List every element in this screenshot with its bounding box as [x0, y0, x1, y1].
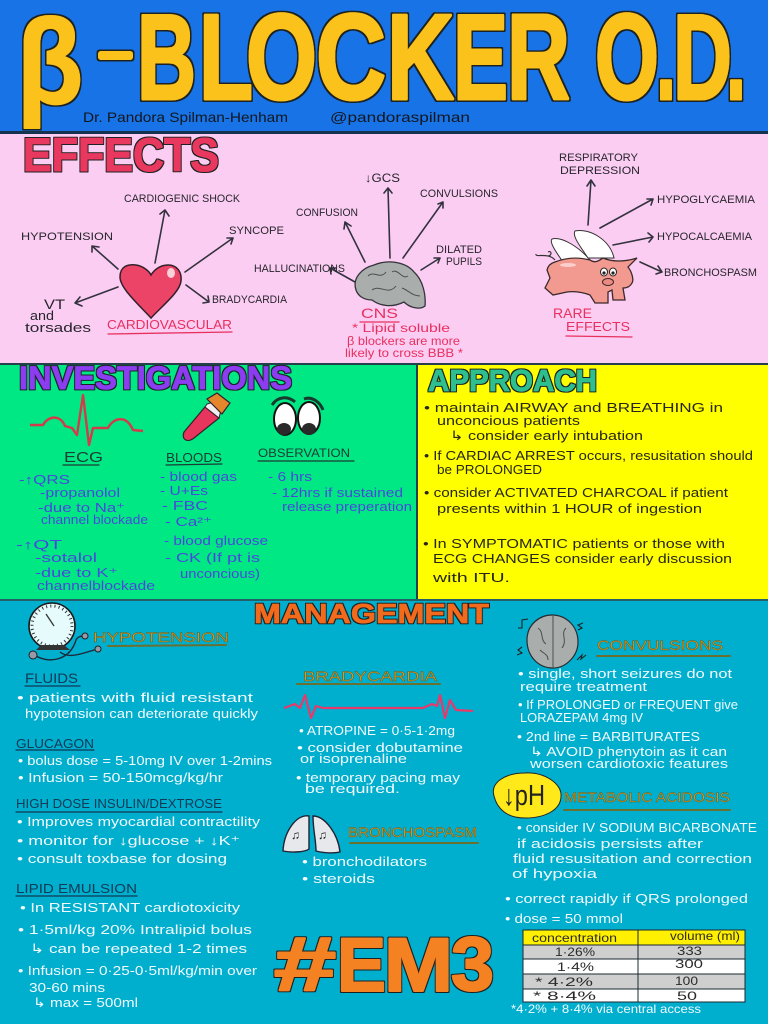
labels: cardiovascular effects: and	[30, 308, 54, 323]
labels: rare effects: RESPIRATORY	[559, 152, 639, 164]
labels: CNS effects: CONVULSIONS	[420, 188, 498, 200]
author handle: @pandoraspilman	[330, 109, 470, 125]
list: metabolic acidosis: • dose = 50 mmol	[505, 911, 623, 926]
table: bicarbonate doses: concentration	[532, 931, 617, 945]
heading: hypotension: HYPOTENSION	[93, 629, 229, 645]
icon: heart	[120, 265, 181, 318]
label: rare effects: RARE	[553, 305, 592, 321]
column: ECG: -↑QRS	[19, 472, 70, 487]
block: high dose insulin: HIGH DOSE INSULIN/DEXTROSE	[16, 797, 222, 811]
list: bradycardia: • ATROPINE = 0·5-1·2mg	[299, 723, 455, 738]
column: ECG	[16, 449, 155, 593]
list: bradycardia	[296, 723, 463, 796]
block: fluids: • patients with fluid resistant	[17, 690, 254, 705]
approach bullet list: presents within 1 HOUR of ingestion	[437, 501, 702, 516]
list: metabolic acidosis: • correct rapidly if QRS prolonged	[505, 891, 748, 906]
labels: cardiovascular effects: CARDIOGENIC SHOCK	[124, 193, 241, 205]
approach bullet list: with ITU.	[431, 570, 510, 585]
panel: title banner	[0, 0, 768, 134]
labels: rare effects: DEPRESSION	[560, 165, 640, 177]
arrows: CNS effects	[330, 188, 443, 282]
block: fluids	[17, 670, 259, 721]
column: bloods: - FBC	[162, 498, 208, 513]
approach heading: APPROACH	[428, 363, 597, 398]
block: lipid emulsion: ↳ max = 500ml	[33, 995, 138, 1010]
list: metabolic acidosis: • consider IV SODIUM BICARBONATE	[517, 820, 757, 835]
approach bullet list: ECG CHANGES consider early discussion	[433, 551, 732, 566]
labels: CNS effects: ↓GCS	[365, 171, 400, 185]
list: metabolic acidosis: if acidosis persists after	[517, 836, 704, 851]
panel: investigations	[0, 360, 768, 600]
table: bicarbonate doses	[523, 929, 745, 1003]
hashtag: #	[274, 922, 336, 1007]
table: bicarbonate doses: * 8·4%	[533, 989, 597, 1003]
investigations heading: INVESTIGATIONS	[19, 360, 292, 396]
arrows: rare effects	[587, 180, 662, 274]
column: ECG: channel blockade	[41, 512, 148, 527]
note: lipid soluble	[345, 321, 463, 360]
column: observation	[258, 446, 412, 514]
approach bullet list: be PROLONGED	[437, 462, 542, 477]
labels: rare effects: BRONCHOSPASM	[664, 267, 757, 279]
panel: management	[0, 598, 768, 1024]
table: bicarbonate doses: * 4·2%	[535, 975, 594, 989]
arrows: cardiovascular effects	[75, 210, 233, 306]
labels: rare effects: HYPOGLYCAEMIA	[657, 194, 756, 206]
note: lipid soluble: likely to cross BBB *	[345, 346, 463, 360]
labels: CNS effects: CONFUSION	[296, 207, 358, 219]
column: bloods: - CK (If pt is	[165, 550, 261, 565]
block: lipid emulsion: • Infusion = 0·25-0·5ml/kg/min over	[18, 963, 258, 978]
labels: cardiovascular effects: torsades	[25, 320, 92, 335]
column: observation: OBSERVATION	[258, 446, 350, 460]
heading: convulsions	[597, 637, 730, 656]
label: cardiovascular: CARDIOVASCULAR	[107, 317, 232, 332]
icon: pH badge: ↓pH	[503, 780, 545, 812]
list: bronchospasm: • steroids	[302, 871, 376, 886]
labels: cardiovascular effects: BRADYCARDIA	[212, 294, 288, 306]
hashtag: 3	[451, 922, 494, 1007]
approach bullet list	[423, 400, 753, 585]
effects heading: EFFECTS	[23, 128, 219, 181]
table: bicarbonate doses: 1·4%	[557, 960, 594, 974]
list: convulsions	[517, 666, 738, 771]
column: bloods: - blood glucose	[164, 533, 268, 548]
block: glucagon: • bolus dose = 5-10mg IV over 1-2mins	[18, 753, 273, 768]
column: observation: release preperation	[282, 499, 412, 514]
table: bicarbonate doses: 300	[675, 957, 703, 971]
labels: CNS effects: DILATED	[436, 244, 482, 256]
column: ECG: -due to Na⁺	[38, 500, 125, 515]
approach bullet list: unconcious patients	[437, 413, 581, 428]
icon: eyes	[272, 398, 323, 435]
heading: bronchospasm: BRONCHOSPASM	[348, 824, 477, 840]
approach bullet list: ↳ consider early intubation	[450, 428, 643, 443]
column: ECG: -propanolol	[40, 485, 120, 500]
icon: brain	[355, 262, 425, 308]
author name: Dr. Pandora Spilman-Henham	[83, 109, 288, 125]
list: bronchospasm: • bronchodilators	[302, 854, 428, 869]
management heading: MANAGEMENT	[254, 598, 489, 629]
block: glucagon: • Infusion = 50-150mcg/kg/hr	[18, 770, 224, 785]
block: high dose insulin: • consult toxbase for dosing	[17, 851, 227, 866]
list: metabolic acidosis: fluid resusitation and correction	[513, 851, 752, 866]
icon: ECG trace	[30, 395, 143, 445]
label: rare effects: EFFECTS	[566, 319, 630, 334]
panel: effects	[0, 128, 768, 364]
labels: CNS effects: PUPILS	[446, 256, 482, 268]
block: lipid emulsion: LIPID EMULSION	[16, 882, 137, 896]
table: bicarbonate doses: 50	[677, 989, 697, 1003]
labels: rare effects: HYPOCALCAEMIA	[657, 231, 753, 243]
block: glucagon: GLUCAGON	[16, 737, 94, 751]
column: ECG: -↑QT	[16, 537, 62, 552]
column: ECG: -sotalol	[35, 550, 97, 565]
icon: pH badge	[493, 773, 561, 818]
block: lipid emulsion: • 1·5ml/kg 20% Intralipid bolus	[18, 922, 253, 937]
column: bloods: - U+Es	[160, 483, 209, 498]
hashtag: M	[384, 923, 453, 1008]
labels: CNS effects	[254, 171, 498, 275]
block: high dose insulin: • monitor for ↓glucose + ↓K⁺	[17, 833, 240, 848]
column: bloods: - Ca²⁺	[165, 514, 212, 529]
list: convulsions: ↳ AVOID phenytoin as it can	[530, 744, 727, 759]
list: convulsions: worsen cardiotoxic features	[529, 756, 729, 771]
heading: metabolic acidosis: METABOLIC ACIDOSIS	[564, 789, 730, 805]
icon: lungs: ♫	[291, 828, 300, 842]
block: high dose insulin: • Improves myocardial contractility	[17, 814, 261, 829]
hashtag: E	[337, 923, 386, 1008]
title text	[98, 0, 746, 125]
column: ECG: ECG	[64, 449, 103, 466]
icon: lungs	[283, 816, 340, 853]
table: bicarbonate doses: 1·26%	[555, 945, 595, 959]
block: lipid emulsion: 30-60 mins	[29, 980, 106, 995]
table: bicarbonate doses: 333	[677, 944, 702, 958]
column: ECG: -due to K⁺	[35, 565, 118, 580]
panel: approach	[416, 363, 768, 600]
block: high dose insulin	[16, 797, 261, 866]
block: lipid emulsion	[16, 882, 258, 1010]
icon: brain with seizure marks	[517, 615, 586, 668]
label: rare effects	[553, 305, 632, 337]
column: bloods: - blood gas	[160, 469, 238, 484]
labels: CNS effects: HALLUCINATIONS	[254, 263, 345, 275]
approach bullet list: • consider ACTIVATED CHARCOAL if patient	[424, 485, 728, 500]
hashtag	[274, 922, 494, 1008]
column: observation: - 6 hrs	[268, 469, 313, 484]
icon: lungs: ♫	[318, 828, 327, 842]
icon: bradycardia ECG	[284, 695, 473, 718]
approach bullet list: • maintain AIRWAY and BREATHING in	[424, 400, 723, 415]
note: central access: *4·2% + 8·4% via central access	[511, 1002, 701, 1016]
icon: blood tube	[183, 393, 230, 440]
block: glucagon	[16, 737, 273, 785]
labels: cardiovascular effects: VT	[44, 296, 66, 312]
block: fluids: hypotension can deteriorate quickly	[25, 706, 259, 721]
label: CNS: CNS	[361, 305, 398, 321]
list: convulsions: • If PROLONGED or FREQUENT give	[518, 697, 738, 712]
block: lipid emulsion: • In RESISTANT cardiotoxicity	[20, 900, 241, 915]
labels: cardiovascular effects	[21, 193, 288, 335]
labels: cardiovascular effects: SYNCOPE	[229, 225, 284, 237]
list: convulsions: LORAZEPAM 4mg IV	[520, 710, 643, 725]
list: bradycardia: • consider dobutamine	[297, 740, 463, 755]
rare effects group	[536, 152, 757, 337]
column: bloods: unconcious)	[180, 566, 260, 581]
labels: rare effects	[559, 152, 757, 279]
column: observation: - 12hrs if sustained	[272, 485, 403, 500]
list: bradycardia: be required.	[305, 781, 400, 796]
labels: cardiovascular effects: HYPOTENSION	[21, 231, 113, 243]
list: metabolic acidosis	[505, 820, 757, 926]
list: bronchospasm	[302, 854, 428, 886]
note: lipid soluble: * Lipid soluble	[352, 321, 450, 335]
column: bloods	[160, 450, 268, 581]
approach bullet list: • If CARDIAC ARREST occurs, resusitation should	[424, 448, 753, 463]
column: bloods: BLOODS	[166, 450, 222, 465]
icon: blood pressure gauge	[29, 603, 101, 660]
cardiovascular group	[21, 193, 288, 335]
block: fluids: FLUIDS	[25, 670, 78, 686]
table: bicarbonate doses: 100	[675, 974, 698, 988]
list: convulsions: • 2nd line = BARBITURATES	[517, 729, 700, 744]
block: lipid emulsion: ↳ can be repeated 1-2 times	[30, 941, 248, 956]
icon: flying pig	[536, 231, 637, 303]
CNS group	[254, 171, 498, 360]
list: convulsions: require treatment	[520, 679, 647, 694]
column: ECG: channelblockade	[37, 578, 155, 593]
table: bicarbonate doses: volume (ml)	[670, 929, 740, 943]
note: lipid soluble: β blockers are more	[347, 334, 460, 348]
list: metabolic acidosis: of hypoxia	[512, 866, 598, 881]
list: convulsions: • single, short seizures do not	[518, 666, 732, 681]
heading: bradycardia: BRADYCARDIA	[303, 668, 438, 684]
heading: convulsions: CONVULSIONS	[597, 637, 723, 653]
list: bradycardia: or isoprenaline	[300, 751, 407, 766]
approach bullet list: • In SYMPTOMATIC patients or those with	[423, 536, 725, 551]
list: bradycardia: • temporary pacing may	[296, 770, 461, 785]
